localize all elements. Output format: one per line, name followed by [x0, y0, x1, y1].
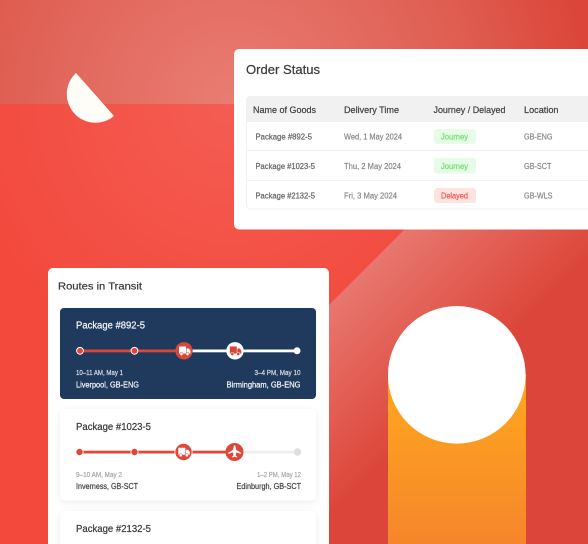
route card: package 892-5: Birmingham, GB-ENG — [226, 380, 300, 390]
table header row: Delivery Time — [344, 105, 399, 115]
panel: routes in transit — [48, 268, 329, 544]
route card: package 892-5: 3–4 PM, May 10 — [254, 370, 301, 377]
table row 3 — [256, 188, 552, 203]
heading: routes in transit: Routes in Transit — [58, 280, 142, 292]
route card: package 892-5: Package #892-5 — [76, 320, 145, 332]
table row 1: Journey — [441, 132, 468, 142]
table row 1: Package #892-5 — [256, 132, 313, 142]
route card: package 1023-5: 9–10 AM, May 2 — [76, 472, 122, 479]
table row 2: Journey — [441, 162, 468, 171]
table row 2: Thu, 2 May 2024 — [344, 162, 402, 171]
table header row: Location — [524, 105, 558, 115]
route card: package 2132-5: Package #2132-5 — [76, 524, 151, 535]
route card: package 1023-5: 1–2 PM, May 12 — [257, 472, 301, 479]
icon: airplane — [228, 446, 241, 458]
route card: package 892-5 — [60, 308, 316, 399]
table row 2: GB-SCT — [524, 162, 552, 171]
route track — [76, 443, 301, 461]
icon: truck light — [178, 448, 190, 457]
route card: package 1023-5 — [60, 409, 316, 500]
route card: package 1023-5: Edinburgh, GB-SCT — [236, 481, 301, 491]
table row 1 — [256, 129, 552, 144]
table row 3: GB-WLS — [524, 192, 552, 200]
table row 1: Wed, 1 May 2024 — [344, 132, 403, 142]
table header row: Name of Goods — [253, 105, 316, 115]
icon: truck light — [179, 346, 190, 356]
decorative half circle — [67, 73, 114, 123]
table header row: Journey / Delayed — [434, 105, 506, 115]
table: orders — [246, 96, 588, 209]
table row 1: GB-ENG — [524, 132, 552, 142]
table row 3: Fri, 3 May 2024 — [344, 192, 398, 200]
panel: order status — [234, 49, 588, 230]
route card: package 1023-5: Package #1023-5 — [76, 422, 151, 433]
table row 2: Package #1023-5 — [256, 162, 316, 171]
route card: package 1023-5: Inverness, GB-SCT — [76, 481, 138, 491]
route card: package 2132-5 — [60, 511, 316, 544]
route track — [77, 342, 300, 359]
table header row — [246, 96, 588, 122]
icon: truck red — [230, 346, 241, 356]
table row 3: Package #2132-5 — [256, 192, 316, 200]
decorative orange column with white circle — [388, 306, 526, 544]
table row 2 — [256, 158, 552, 174]
heading: order status: Order Status — [246, 62, 320, 77]
route card: package 892-5: Liverpool, GB-ENG — [76, 380, 139, 390]
table row 3: Delayed — [441, 192, 468, 200]
route card: package 892-5: 10–11 AM, May 1 — [76, 370, 123, 377]
